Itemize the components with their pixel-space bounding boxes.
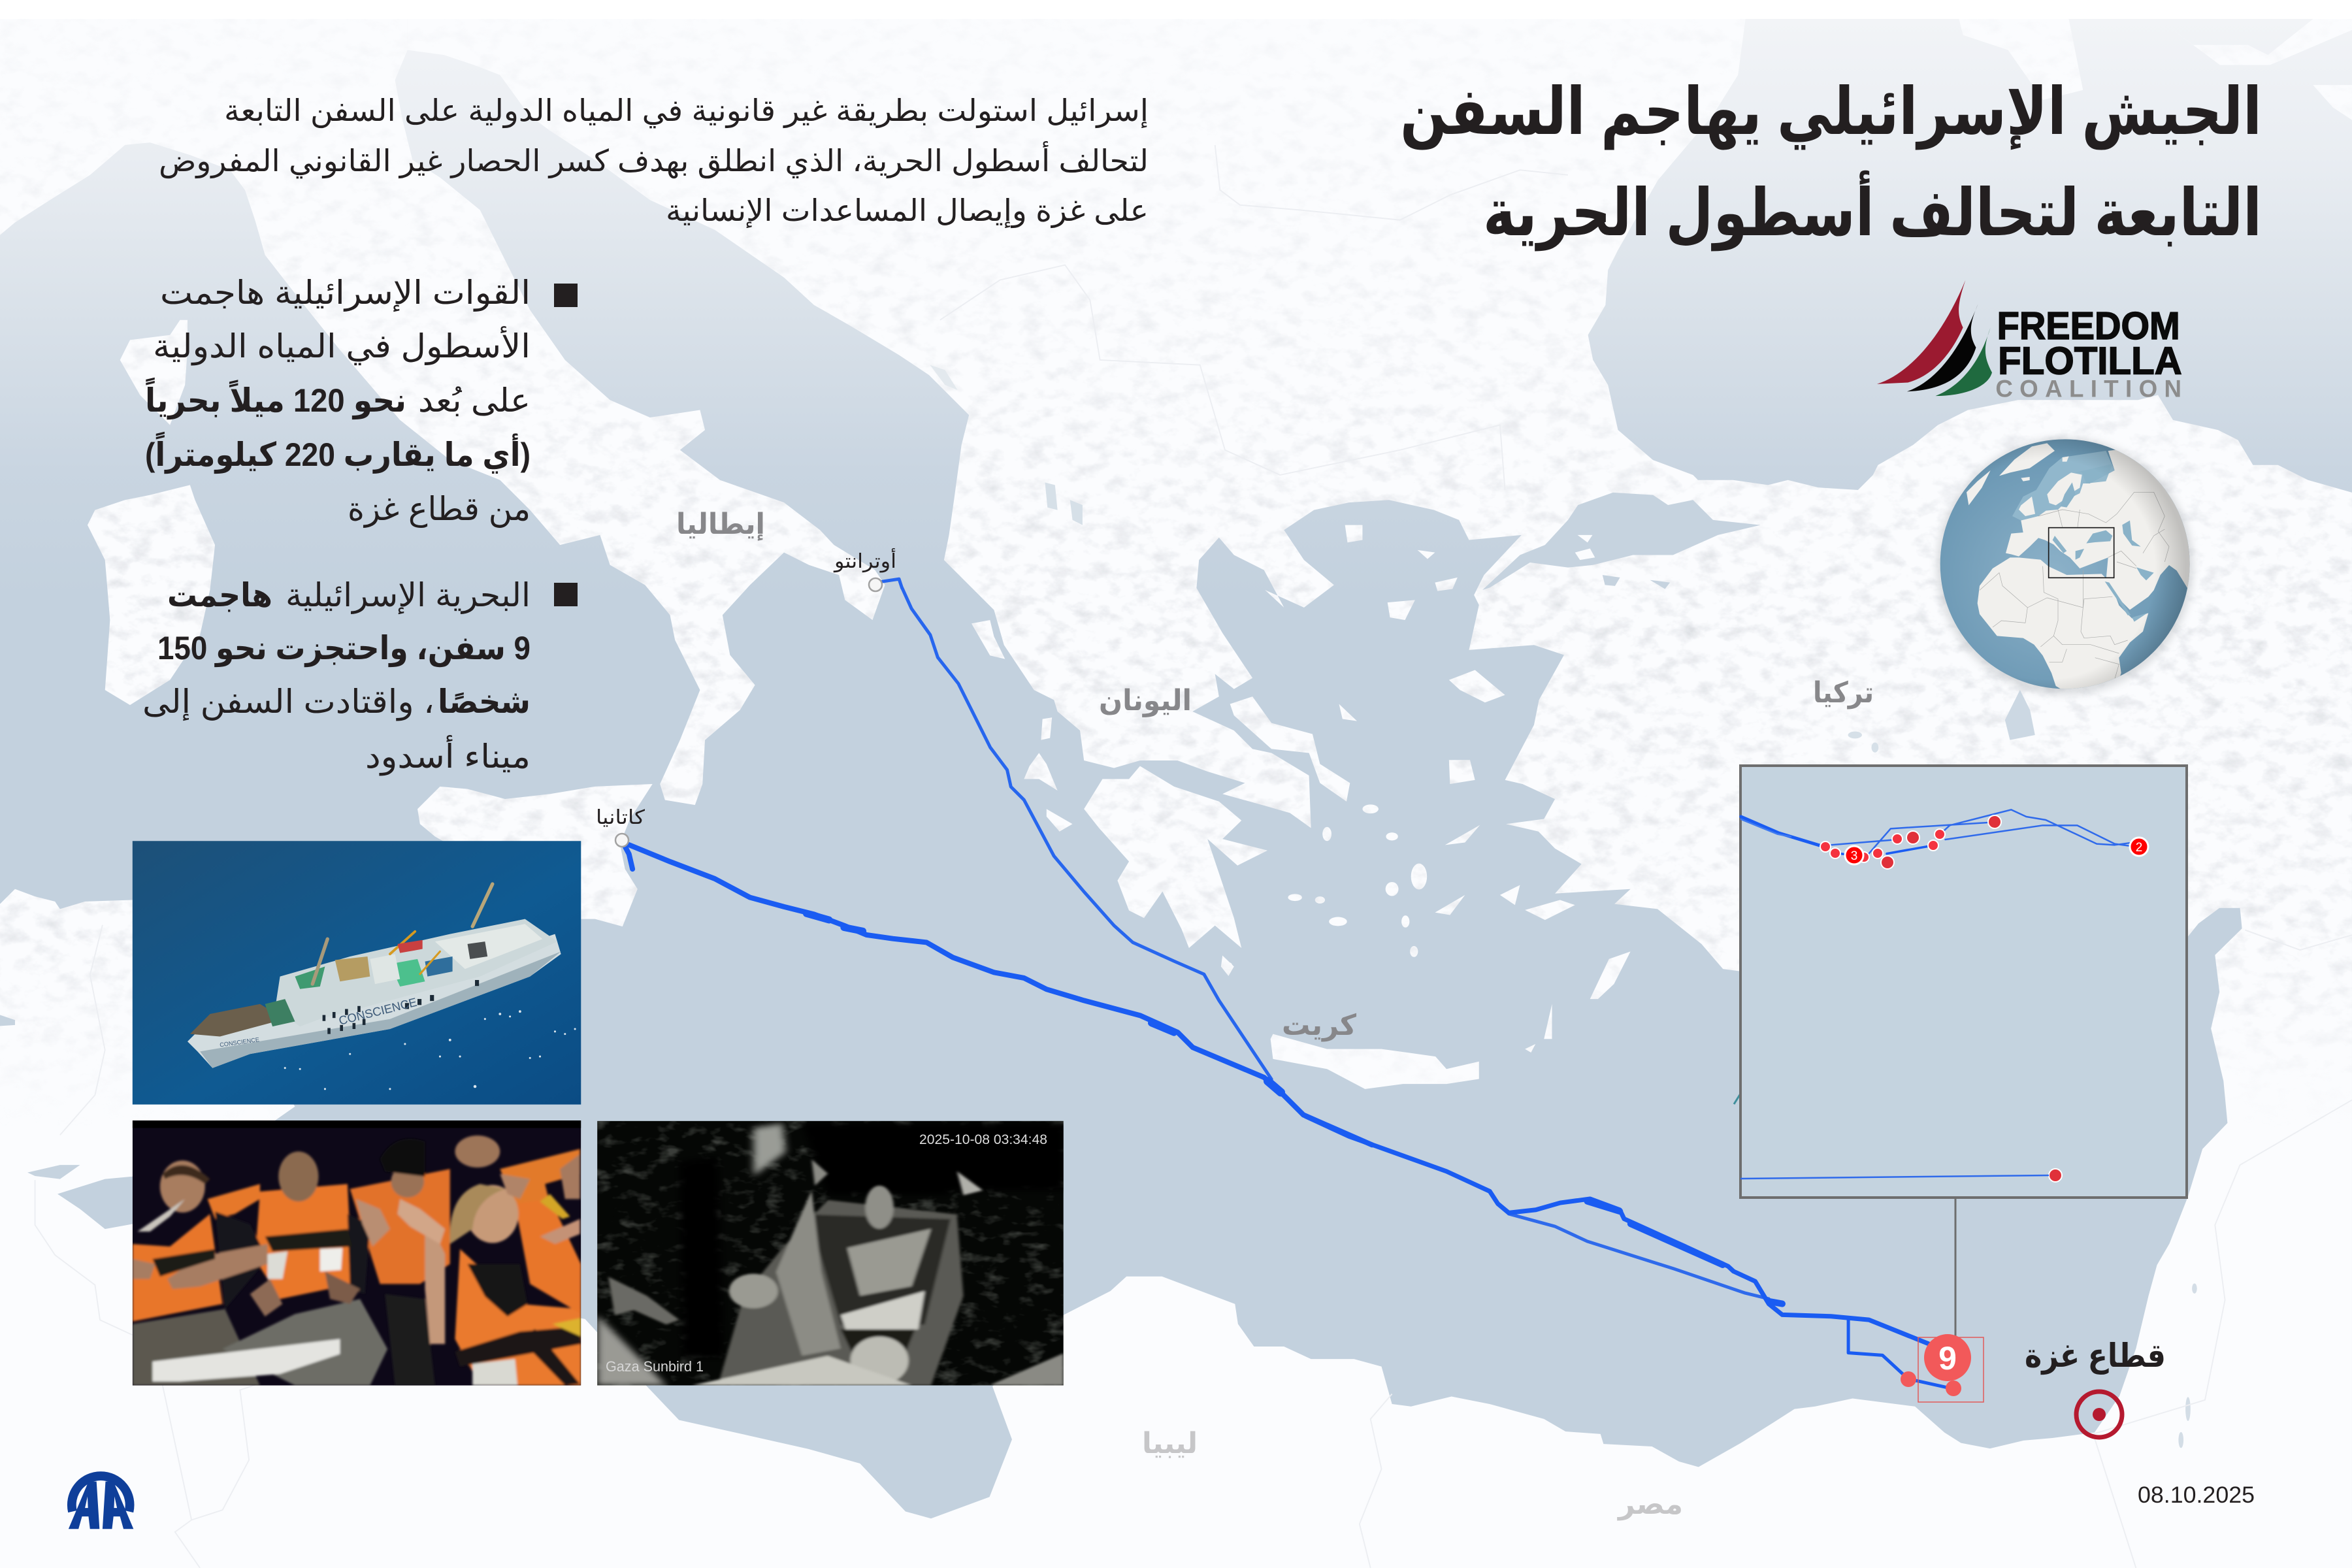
label: Catania: كاتانيا <box>596 807 645 828</box>
bullet block 1: من قطاع غزة <box>348 491 531 528</box>
intro text: لتحالف أسطول الحرية، الذي انطلق بهدف كسر الحصار غير القانوني المفروض <box>159 141 1149 179</box>
label: Greece: اليونان <box>1099 685 1192 717</box>
intro text <box>159 93 1149 229</box>
locator globe <box>1936 438 2193 694</box>
bullet block 1: على بُعد <box>418 382 531 419</box>
photo: ship Conscience <box>133 841 581 1105</box>
inset panel: attack locations: 3 <box>1851 849 1857 863</box>
inset connector line <box>1955 1198 1956 1337</box>
label: Libya: ليبيا <box>1142 1428 1198 1460</box>
route: Catania start hook <box>625 847 632 869</box>
label: Egypt: مصر <box>1617 1488 1683 1521</box>
photo caption: timestamp: 2025-10-08 03:34:48 <box>919 1132 1047 1147</box>
bullet block 1: (أي ما يقارب 220 كيلومتراً) <box>145 431 531 474</box>
logo: Freedom Flotilla Coalition: FLOTILLA <box>1998 338 2182 382</box>
label: Crete: كريت <box>1282 1009 1356 1042</box>
top white margin <box>0 0 2352 19</box>
title <box>1400 75 2262 252</box>
marker: attack area box <box>1901 1334 1984 1402</box>
photo: night camera footage of Gaza Sunbird 1 <box>597 1121 1064 1386</box>
bullet block 2: هاجمت <box>167 577 272 613</box>
bullet block 2: ، واقتادت السفن إلى <box>142 683 434 721</box>
bullet block 1: القوات الإسرائيلية هاجمت <box>160 274 531 312</box>
photo: ship Conscience: CONSCIENCE <box>337 995 418 1028</box>
route: Crete to Gaza approach <box>1305 1117 1953 1389</box>
route: Otranto to Crete <box>883 579 1271 1079</box>
bullet block 2: شخصًا <box>438 683 531 720</box>
logo: Freedom Flotilla Coalition: FREEDOM <box>1997 304 2180 348</box>
bullet block 1: نحو 120 ميلاً بحرياً <box>145 377 406 420</box>
bullet block 2: 9 سفن، واحتجزت نحو 150 <box>157 630 531 668</box>
bullet block 2: ميناء أسدود <box>365 735 531 776</box>
map: terrain shading <box>0 123 2352 1056</box>
marker: Otranto port <box>869 578 882 591</box>
bullet block 2: البحرية الإسرائيلية <box>286 577 531 614</box>
marker: teal fragment <box>1734 1094 1740 1104</box>
intro text: على غزة وإيصال المساعدات الإنسانية <box>666 193 1149 229</box>
route: Catania to Crete <box>629 845 1372 1145</box>
label: Italy: إيطاليا <box>676 508 765 541</box>
label: Otranto: أوترانتو <box>833 547 896 573</box>
inset panel: attack locations <box>1740 766 2187 1198</box>
marker: Gaza target <box>2076 1392 2122 1437</box>
photo caption: vessel name: Gaza Sunbird 1 <box>606 1358 704 1375</box>
photo: detained activists <box>133 1120 581 1386</box>
bullet block 1: الأسطول في المياه الدولية <box>153 326 531 366</box>
logo: Freedom Flotilla Coalition <box>1877 280 2182 402</box>
logo: Anadolu Agency <box>69 1476 133 1529</box>
label: Turkey: تركيا <box>1813 677 1874 710</box>
marker: Catania port <box>615 834 629 847</box>
photo: ship Conscience: CONSCIENCE <box>220 1036 260 1049</box>
logo: Freedom Flotilla Coalition: COALITION <box>1995 376 2181 402</box>
date: 08.10.2025 <box>2138 1482 2255 1508</box>
label: Gaza Strip: قطاع غزة <box>2025 1337 2166 1375</box>
bullet block 2 <box>142 577 578 776</box>
inset panel: attack locations: 2 <box>2136 841 2142 855</box>
bullet block 1 <box>145 274 578 528</box>
marker: attack area box: 9 <box>1938 1340 1957 1377</box>
intro text: إسرائيل استولت بطريقة غير قانونية في المياه الدولية على السفن التابعة <box>224 93 1149 129</box>
